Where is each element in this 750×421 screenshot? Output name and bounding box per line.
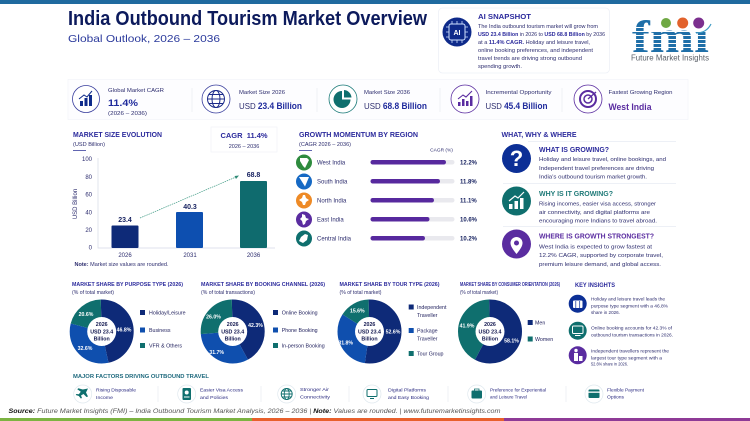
heading: tour type: MARKET SHARE BY TOUR TYPE (2026) xyxy=(340,282,440,288)
block: where is growth strongest: West India is expected to grow fastest at xyxy=(539,244,653,250)
heading: what why where: WHAT, WHY & WHERE xyxy=(502,132,577,139)
bottom colour bar xyxy=(0,418,750,421)
donut chart: tour type: Billion xyxy=(361,336,378,342)
text: AI snapshot body: USD 23.4 Billion in 2026 to USD 68.8 Billion by 2036 xyxy=(478,32,605,38)
logo: Future Market Insights: Future Market Insights xyxy=(631,54,709,62)
panel: what, why and where xyxy=(502,132,676,268)
insight: independent travellers: largest tour type segment with a xyxy=(591,355,662,360)
row: Central India: Central India xyxy=(317,236,352,242)
callout: CAGR: 2026 – 2036 xyxy=(229,144,259,150)
icon: AI chip: AI xyxy=(454,30,461,37)
insight: holiday and leisure xyxy=(569,295,668,315)
KPI: market size 2026 xyxy=(202,85,302,113)
panel: growth momentum by region: CAGR (%) xyxy=(430,148,453,154)
factor: flexible payment: Flexible Payment xyxy=(607,388,645,394)
insight: online booking: Online booking accounts for 42.3% of xyxy=(591,326,673,331)
row: Central India: 10.2% xyxy=(460,237,478,243)
factor: flexible payment: Options xyxy=(607,394,625,400)
block: what is growing xyxy=(502,144,666,180)
bar chart: market size: 80 xyxy=(85,175,93,181)
legend: consumer orientation xyxy=(528,320,553,343)
legend: tour type: Traveller xyxy=(417,313,438,319)
donut chart: tour type xyxy=(338,308,401,354)
bar chart: market size: USD Billion xyxy=(73,189,79,219)
row: East India: 10.6% xyxy=(460,218,478,224)
text: AI snapshot body: spending growth. xyxy=(478,64,522,70)
row: South India: South India xyxy=(317,180,348,186)
block: where is growth strongest: 12.2% CAGR, supported by corporate travel, xyxy=(539,253,664,259)
legend: tour type: Tour Group xyxy=(417,352,444,358)
donut chart: booking channel: USD 23.4 xyxy=(221,330,244,336)
heading: AI snapshot: AI SNAPSHOT xyxy=(478,12,531,21)
source line: Source: Future Market Insights (FMI) – India Outbound Tourism Market Analysis, 2026 – 2036 | Note: Values are rounded. | www.futuremarketinsights.com xyxy=(8,408,501,415)
row: Central India xyxy=(296,230,478,246)
legend: tour type xyxy=(409,304,447,358)
donut chart: tour type: USD 23.4 xyxy=(358,330,381,336)
donut chart: consumer orientation: 41.9% xyxy=(460,323,475,329)
factor: visa access: and Policies xyxy=(200,395,229,401)
block: what is growing: WHAT IS GROWING? xyxy=(539,147,609,154)
row: East India: East India xyxy=(317,218,344,224)
insight: holiday and leisure: Holiday and leisure travel leads the xyxy=(591,297,665,302)
KPI: fastest growing region xyxy=(574,85,672,113)
donut chart: consumer orientation: Billion xyxy=(482,336,498,342)
factor: air connectivity xyxy=(278,385,331,403)
donut chart: purpose type: 46.8% xyxy=(117,328,132,334)
panel: share by booking channel xyxy=(201,282,325,356)
factor: air connectivity: Stronger Air xyxy=(300,387,329,393)
text: AI snapshot body xyxy=(478,24,605,70)
row: West India: West India xyxy=(317,160,346,166)
KPI: market size 2026: Market Size 2026 xyxy=(239,90,285,96)
KPI: fastest growing region: Fastest Growing Region xyxy=(608,90,672,96)
KPI: incremental opportunity xyxy=(451,85,552,113)
subheading: CAGR period: (CAGR 2026 – 2036) xyxy=(299,142,351,148)
bar chart: market size: 2031 xyxy=(183,253,197,259)
KPI: fastest growing region: West India xyxy=(608,102,652,113)
bar chart: market size: 100 xyxy=(82,157,93,163)
callout: CAGR: CAGR 11.4% xyxy=(220,131,268,140)
legend: tour type: Package xyxy=(417,328,438,334)
icon: AI chip xyxy=(442,18,472,46)
text: AI snapshot body: travel trends are driving strong outbound xyxy=(478,56,582,62)
row: North India xyxy=(296,192,477,208)
subtitle: Global Outlook, 2026 – 2036 xyxy=(68,33,220,45)
row: South India: 11.8% xyxy=(460,180,477,186)
heading: major factors: MAJOR FACTORS DRIVING OUTBOUND TRAVEL xyxy=(73,374,210,380)
panel: share by consumer orientation: (% of total market) xyxy=(460,290,498,296)
panel: KPI row xyxy=(68,80,688,120)
bar chart: market size xyxy=(73,157,275,259)
logo: Future Market Insights: fmi xyxy=(632,11,709,62)
block: what is growing: ? xyxy=(510,146,523,171)
donut chart: tour type: 52.6% xyxy=(386,330,401,336)
panel: share by consumer orientation xyxy=(460,282,560,354)
factor: air connectivity: Connectivity xyxy=(300,394,331,400)
donut chart: booking channel: Billion xyxy=(225,336,241,342)
KPI: incremental opportunity: Incremental Opportunity xyxy=(486,90,552,96)
donut chart: consumer orientation: USD 23.4 xyxy=(479,330,502,336)
KPI: incremental opportunity: USD 45.4 Billion xyxy=(486,101,548,111)
title: India Outbound Tourism Market Overview xyxy=(68,8,427,30)
row: East India xyxy=(296,212,478,228)
block: why is it growing: air connectivity, and digital platforms are xyxy=(539,210,650,216)
factor: digital platforms: Digital Platforms xyxy=(388,388,427,394)
block: why is it growing: encouraging more Indians to travel abroad. xyxy=(539,218,658,224)
factor: experiential travel xyxy=(468,385,546,403)
KPI: global market CAGR: 11.4% xyxy=(108,98,139,109)
text: AI snapshot body: online booking preferences, and independent xyxy=(478,48,594,54)
callout: CAGR xyxy=(211,127,277,152)
heading: growth momentum: GROWTH MOMENTUM BY REGION xyxy=(299,132,418,139)
bar chart: market size: 20 xyxy=(85,228,93,234)
donut chart: consumer orientation: 58.1% xyxy=(504,338,519,344)
arrow: growth trend xyxy=(140,176,239,218)
donut chart: purpose type: 32.6% xyxy=(78,346,93,352)
text: AI snapshot body: The India outbound tourism market will grow from xyxy=(478,24,599,30)
legend: purpose type: Holiday/Leisure xyxy=(149,310,186,316)
insight: holiday and leisure: purpose type segment with a 46.8% xyxy=(591,303,668,308)
factor: disposable income: Income xyxy=(96,395,113,401)
factor: visa access xyxy=(178,385,244,403)
bar chart: market size: 23.4 xyxy=(118,217,132,224)
legend: booking channel: Phone Booking xyxy=(282,328,318,334)
block: why is it growing: WHY IS IT GROWING? xyxy=(539,191,613,198)
donut chart: tour type: 15.6% xyxy=(350,309,365,315)
bar chart: market size: 60 xyxy=(85,192,93,198)
donut chart: purpose type: USD 23.4 xyxy=(90,330,113,336)
donut chart: purpose type xyxy=(78,308,132,354)
bar chart: market size: 40.3 xyxy=(183,204,197,211)
legend: purpose type: Business xyxy=(149,328,171,334)
top bar xyxy=(0,0,750,4)
legend: tour type: Traveller xyxy=(417,336,438,342)
legend: consumer orientation: Men xyxy=(535,320,545,326)
donut chart: consumer orientation xyxy=(460,308,519,354)
insight: online booking: outbound tourism transactions in 2026. xyxy=(591,332,673,337)
row: South India xyxy=(296,174,477,190)
subheading: units: (USD Billion) xyxy=(73,142,105,148)
panel: AI snapshot xyxy=(438,8,610,73)
heading: key insights: KEY INSIGHTS xyxy=(575,282,616,289)
bar chart: market size: 68.8 xyxy=(247,172,260,179)
factor: disposable income: Rising Disposable xyxy=(96,388,136,394)
panel: share by purpose type xyxy=(72,282,186,354)
donut chart: consumer orientation: 2026 xyxy=(484,322,496,328)
panel: market size evolution xyxy=(73,127,277,268)
KPI: market size 2036: USD 68.8 Billion xyxy=(364,101,427,111)
KPI: market size 2026: USD 23.4 Billion xyxy=(239,101,302,111)
block: where is growth strongest xyxy=(502,230,664,268)
block: what is growing: Holiday and leisure travel, online bookings, and xyxy=(539,157,666,163)
donut chart: purpose type: Billion xyxy=(94,336,110,342)
insight: independent travellers: Independent travellers represent the xyxy=(591,349,669,354)
factor: visa access: Easier Visa Access xyxy=(200,388,244,394)
row: West India: 12.2% xyxy=(460,161,478,167)
factor: digital platforms xyxy=(363,385,429,403)
KPI: global market CAGR: Global Market CAGR xyxy=(108,88,164,94)
insight: holiday and leisure: share in 2026. xyxy=(591,310,620,315)
panel: growth momentum by region xyxy=(296,132,478,246)
insight: independent travellers: 52.6% share in 2026. xyxy=(591,362,628,366)
factor: flexible payment xyxy=(585,385,645,403)
panel: share by booking channel: (% of total transactions) xyxy=(201,290,255,296)
legend: tour type: Independent xyxy=(417,305,447,311)
row: North India: North India xyxy=(317,198,347,204)
factor: disposable income xyxy=(74,385,136,403)
factor: experiential travel: and Leisure Travel xyxy=(490,394,527,400)
insight: online booking xyxy=(569,322,673,340)
block: why is it growing: Rising incomes, easier visa access, stronger xyxy=(539,202,656,208)
donut chart: booking channel: 26.0% xyxy=(206,314,221,320)
heading: booking channel: MARKET SHARE BY BOOKING CHANNEL (2026) xyxy=(201,282,325,288)
bar chart: market size: 0 xyxy=(89,246,93,252)
donut chart: booking channel: 31.7% xyxy=(209,350,224,356)
block: where is growth strongest: WHERE IS GROWTH STRONGEST? xyxy=(539,234,654,240)
KPI: market size 2036: Market Size 2036 xyxy=(364,90,410,96)
text: AI snapshot body: at a 11.4% CAGR. Holiday and leisure travel, xyxy=(478,40,590,46)
donut chart: tour type: 2026 xyxy=(364,322,375,328)
panel: major factors xyxy=(73,374,645,403)
heading: purpose type: MARKET SHARE BY PURPOSE TYPE (2026) xyxy=(72,282,183,288)
legend: purpose type xyxy=(140,310,186,350)
legend: purpose type: VFR & Others xyxy=(149,344,182,350)
bar chart: market size: 2026 xyxy=(118,253,132,259)
donut chart: purpose type: 20.6% xyxy=(79,312,94,318)
legend: booking channel: Online Booking xyxy=(282,310,318,316)
heading: consumer orientation: MARKET SHARE BY CONSUMER ORIENTATION (2026) xyxy=(460,282,560,288)
KPI: global market CAGR: (2026 – 2036) xyxy=(108,111,147,117)
bar chart: market size: 2036 xyxy=(247,253,261,259)
legend: booking channel xyxy=(273,310,325,350)
block: what is growing: India's outbound tourism market growth. xyxy=(539,174,648,180)
KPI: market size 2036 xyxy=(329,85,427,113)
factor: digital platforms: and Easy Booking xyxy=(388,395,429,401)
panel: share by tour type xyxy=(338,282,447,358)
legend: booking channel: In-person Booking xyxy=(282,344,325,350)
KPI: global market CAGR xyxy=(72,86,164,117)
legend: consumer orientation: Women xyxy=(535,337,553,343)
heading: market size evolution: MARKET SIZE EVOLUTION xyxy=(73,132,162,139)
row: West India xyxy=(296,154,478,170)
block: what is growing: Independent travel preferences are driving xyxy=(539,166,654,172)
block: why is it growing xyxy=(502,186,658,224)
panel: key insights xyxy=(569,282,673,366)
panel: share by purpose type: (% of total market) xyxy=(72,290,114,296)
panel: share by tour type: (% of total market) xyxy=(340,290,382,296)
insight: independent travellers xyxy=(569,346,669,366)
factor: experiential travel: Preference for Experiential xyxy=(490,388,546,394)
donut chart: booking channel: 2026 xyxy=(227,322,239,328)
block: where is growth strongest: premium leisure demand, and global access. xyxy=(539,262,662,268)
donut chart: tour type: 31.8% xyxy=(338,341,353,347)
note: rounding: Note: Market size values are rounded. xyxy=(74,262,168,268)
donut chart: booking channel xyxy=(206,308,263,356)
bar chart: market size: 40 xyxy=(85,210,93,216)
row: North India: 11.1% xyxy=(460,199,477,205)
donut chart: purpose type: 2026 xyxy=(96,322,108,328)
donut chart: booking channel: 42.3% xyxy=(248,323,263,329)
